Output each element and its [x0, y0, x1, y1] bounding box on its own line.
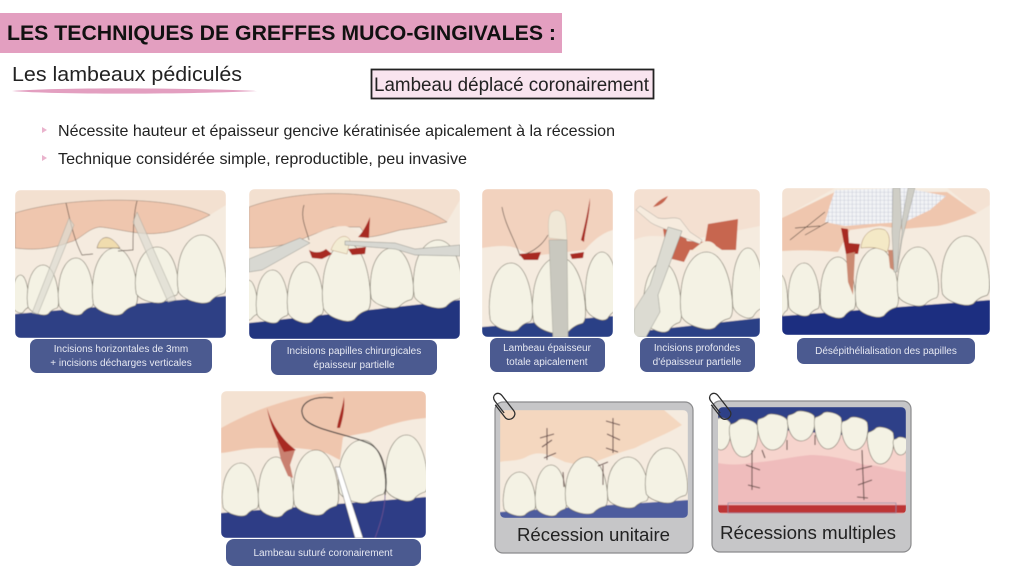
caption 1 — [30, 339, 212, 373]
caption 4: Incisions profondes — [654, 343, 740, 354]
caption 1: Incisions horizontales de 3mm — [54, 344, 188, 355]
title — [0, 13, 562, 53]
illustration 6 — [221, 391, 428, 538]
caption 4 — [640, 338, 755, 372]
illustration 2 — [238, 189, 463, 339]
icon: paperclip — [490, 391, 517, 421]
bullet list: Nécessite hauteur et épaisseur gencive kératinisée apicalement à la récession — [58, 123, 615, 140]
illustration 4 — [634, 189, 764, 337]
caption 2: épaisseur partielle — [313, 360, 395, 371]
card: récessions multiples — [706, 391, 911, 552]
panel: lambeau épaisseur totale — [482, 189, 619, 372]
caption 3 — [490, 338, 605, 372]
caption 5 — [797, 338, 975, 364]
card label: Récession unitaire — [517, 525, 670, 545]
caption 5: Désépithélialisation des papilles — [815, 346, 957, 357]
caption 4: d'épaisseur partielle — [653, 357, 742, 368]
illustration 5 — [773, 188, 990, 335]
caption 3: totale apicalement — [506, 357, 588, 368]
caption 3: Lambeau épaisseur — [503, 343, 592, 354]
panel: lambeau suturé — [221, 391, 428, 566]
illustration 1 — [12, 190, 227, 338]
caption 2 — [271, 340, 437, 375]
caption 6: Lambeau suturé coronairement — [254, 548, 393, 559]
panel: incisions horizontales — [12, 190, 227, 373]
panel: incisions profondes — [634, 189, 764, 372]
bullet list — [42, 123, 615, 168]
illustration 7 — [500, 410, 688, 518]
illustration 3 — [482, 189, 619, 337]
card label: Récessions multiples — [720, 523, 896, 543]
technique label box: Lambeau déplacé coronairement — [374, 75, 650, 96]
caption 6 — [226, 539, 421, 566]
bullet list: Technique considérée simple, reproductible, peu invasive — [58, 151, 467, 168]
subtitle: les lambeaux pédiculés — [12, 64, 257, 94]
caption 2: Incisions papilles chirurgicales — [287, 346, 421, 357]
subtitle: les lambeaux pédiculés: Les lambeaux pédiculés — [12, 64, 242, 86]
caption 1: + incisions décharges verticales — [50, 358, 192, 369]
panel: incisions papilles — [238, 189, 463, 375]
panel: désépithélialisation — [773, 188, 990, 364]
title: LES TECHNIQUES DE GREFFES MUCO-GINGIVALES : — [7, 22, 556, 45]
card: récession unitaire — [490, 391, 693, 553]
icon: paperclip — [706, 391, 733, 421]
illustration 8 — [711, 407, 908, 514]
